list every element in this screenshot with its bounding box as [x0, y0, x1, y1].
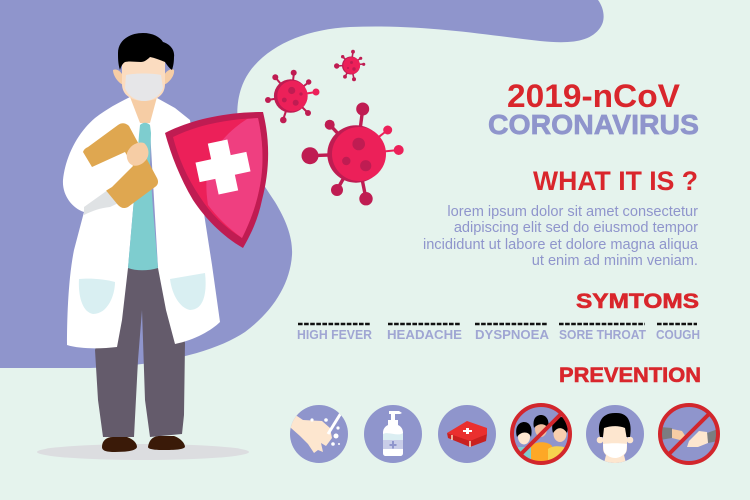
floor shadow	[37, 444, 249, 460]
title	[488, 78, 699, 140]
hair	[118, 33, 174, 70]
lab coat	[63, 97, 220, 348]
description text: incididunt ut labore et dolore magna aliqua	[423, 237, 699, 253]
symptom list: HIGH FEVER	[297, 328, 372, 342]
medical cross	[192, 136, 254, 198]
hand	[127, 142, 148, 166]
purple background blob	[0, 0, 604, 368]
description text: adipiscing elit sed do eiusmod tempor	[454, 220, 698, 236]
description text: ut enim ad minim veniam.	[532, 253, 698, 269]
description text: lorem ipsum dolor sit amet consectetur	[447, 204, 698, 220]
icon: hand sanitizer	[364, 405, 422, 463]
doctor figure	[37, 33, 249, 460]
face mask	[125, 74, 163, 101]
neck	[130, 97, 157, 123]
trousers	[95, 266, 185, 437]
symptom list: SORE THROAT	[559, 328, 646, 342]
symptom list: HEADACHE	[387, 328, 462, 342]
icon: no handshake	[660, 405, 718, 463]
virus small	[334, 50, 365, 81]
symptom list	[297, 324, 700, 342]
icon: first aid kit	[438, 405, 496, 463]
pockets	[79, 273, 206, 314]
title: 2019-nCoV	[507, 78, 681, 114]
heading: what it is: WHAT IT IS ?	[533, 166, 698, 196]
symptom list: COUGH	[656, 328, 700, 342]
heading: symptoms: SYMTOMS	[576, 290, 699, 313]
shield	[165, 112, 268, 248]
description text	[423, 204, 699, 269]
virus medium	[265, 70, 320, 123]
face	[122, 55, 165, 101]
heading: prevention: PREVENTION	[559, 364, 701, 387]
clipboard	[83, 123, 158, 208]
title: CORONAVIRUS	[488, 109, 699, 140]
shoes	[102, 436, 185, 452]
coat sleeve	[70, 152, 133, 203]
icon: wear mask	[586, 405, 644, 463]
arm shadow	[84, 187, 125, 215]
icon: avoid crowds	[512, 405, 570, 463]
symptom list: DYSPNOEA	[475, 328, 549, 342]
shirt and tie	[128, 123, 158, 270]
icon: hand washing	[288, 405, 348, 463]
ears	[113, 69, 174, 85]
virus large	[302, 102, 404, 205]
